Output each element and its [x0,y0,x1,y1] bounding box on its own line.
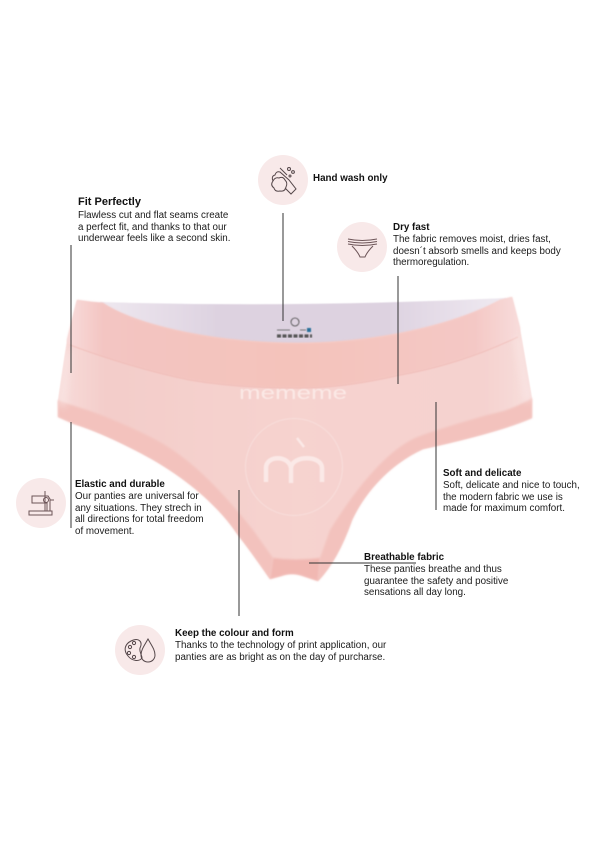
text: hand wash only: Hand wash only [313,173,388,184]
text: soft and delicate: the modern fabric we use is [443,492,563,503]
left leg hem [58,400,273,579]
right leg hem [318,398,532,581]
text: fit perfectly: underwear feels like a second skin. [78,233,230,244]
text: soft and delicate: made for maximum comfort. [443,503,565,514]
text: dry fast [393,222,561,268]
crotch panel [270,558,320,581]
inner back lining [96,298,510,370]
waistband seam [70,337,518,388]
text: soft and delicate: Soft and delicate [443,468,521,479]
text: breathable fabric: Breathable fabric [364,552,444,563]
text: dry fast: doesn´t absorb smells and keeps body [393,246,561,257]
callout lines [71,213,436,616]
text: dry fast: The fabric removes moist, dries fast, [393,234,551,245]
text: fit perfectly: Flawless cut and flat seams create [78,210,228,221]
text: keep the colour and form: Thanks to the technology of print application, our [175,640,386,651]
icon: sewing machine [16,478,66,528]
icon: palette and drop [115,625,165,675]
text: elastic and durable: Elastic and durable [75,479,165,490]
text: breathable fabric: These panties breathe and thus [364,564,502,575]
text: keep the colour and form [175,628,386,663]
text: keep the colour and form: panties are as bright as on the day of purcharse. [175,652,385,663]
icon: briefs [337,222,387,272]
text: soft and delicate: Soft, delicate and nice to touch, [443,480,580,491]
waistband label [277,318,312,336]
text: breathable fabric [364,552,508,598]
text: elastic and durable: Our panties are universal for [75,491,199,502]
text: dry fast: Dry fast [393,222,429,233]
text: fit perfectly [78,196,230,244]
text: soft and delicate [443,468,580,514]
text: elastic and durable: of movement. [75,526,134,537]
wordmark on fabric: mememe [239,383,347,403]
waistband [67,297,520,388]
text: elastic and durable: all directions for total freedom [75,514,204,525]
text: fit perfectly: a perfect fit, and thanks to that our [78,222,227,233]
text: fit perfectly: Fit Perfectly [78,196,141,208]
text: elastic and durable: any situations. They strech in [75,503,202,514]
text: breathable fabric: sensations all day long. [364,587,466,598]
panties garment [58,297,532,581]
illustration: pink panties with callout lines and icons [16,155,534,675]
icon: hand wash [258,155,308,205]
side highlight [58,400,530,407]
text: keep the colour and form: Keep the colour and form [175,628,294,639]
text: elastic and durable [75,479,204,537]
text: dry fast: thermoregulation. [393,257,469,268]
text: breathable fabric: guarantee the safety and positive [364,576,508,587]
garment body [58,297,532,581]
logo circle on fabric [246,418,342,516]
